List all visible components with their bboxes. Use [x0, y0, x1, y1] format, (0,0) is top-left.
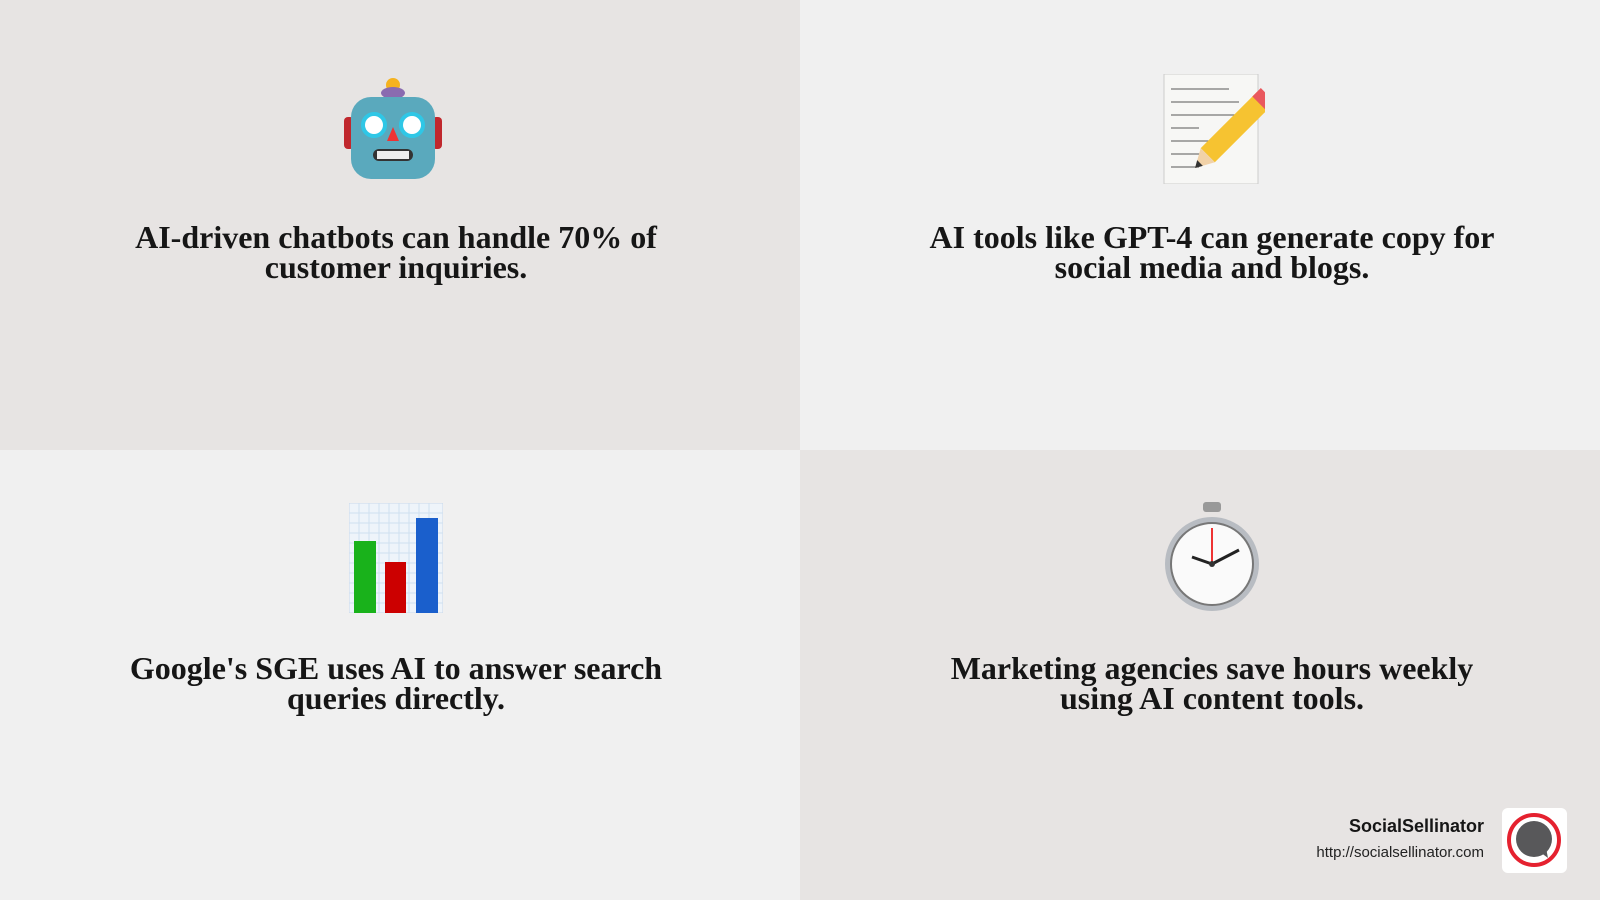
- text: chatbots: AI-driven chatbots can handle 70% of: [135, 219, 657, 255]
- brand block: [1316, 808, 1567, 873]
- panel: chatbots: [0, 0, 800, 450]
- text: SGE: [130, 650, 662, 716]
- panel: SGE: [0, 450, 800, 900]
- text: agencies: [951, 650, 1473, 716]
- text: agencies: Marketing agencies save hours weekly: [951, 650, 1473, 686]
- text: agencies: using AI content tools.: [1060, 680, 1364, 716]
- brand name: SocialSellinator: [1349, 816, 1484, 836]
- brand url: http://socialsellinator.com: [1316, 844, 1484, 861]
- text: SGE: queries directly.: [287, 680, 505, 716]
- panel: copy: [800, 0, 1600, 450]
- text: chatbots: [135, 219, 658, 285]
- icon: stopwatch: [1165, 502, 1259, 611]
- icon: bar chart: [349, 503, 443, 613]
- logo: [1502, 808, 1567, 873]
- icon: memo pencil: [1164, 74, 1265, 184]
- text: copy: AI tools like GPT-4 can generate copy for: [930, 219, 1494, 255]
- icon: robot: [344, 78, 442, 179]
- text: chatbots: customer inquiries.: [265, 249, 527, 285]
- text: copy: [930, 219, 1494, 285]
- text: SGE: Google's SGE uses AI to answer search: [130, 650, 662, 686]
- text: copy: social media and blogs.: [1055, 249, 1369, 285]
- panel: agencies: [800, 450, 1600, 900]
